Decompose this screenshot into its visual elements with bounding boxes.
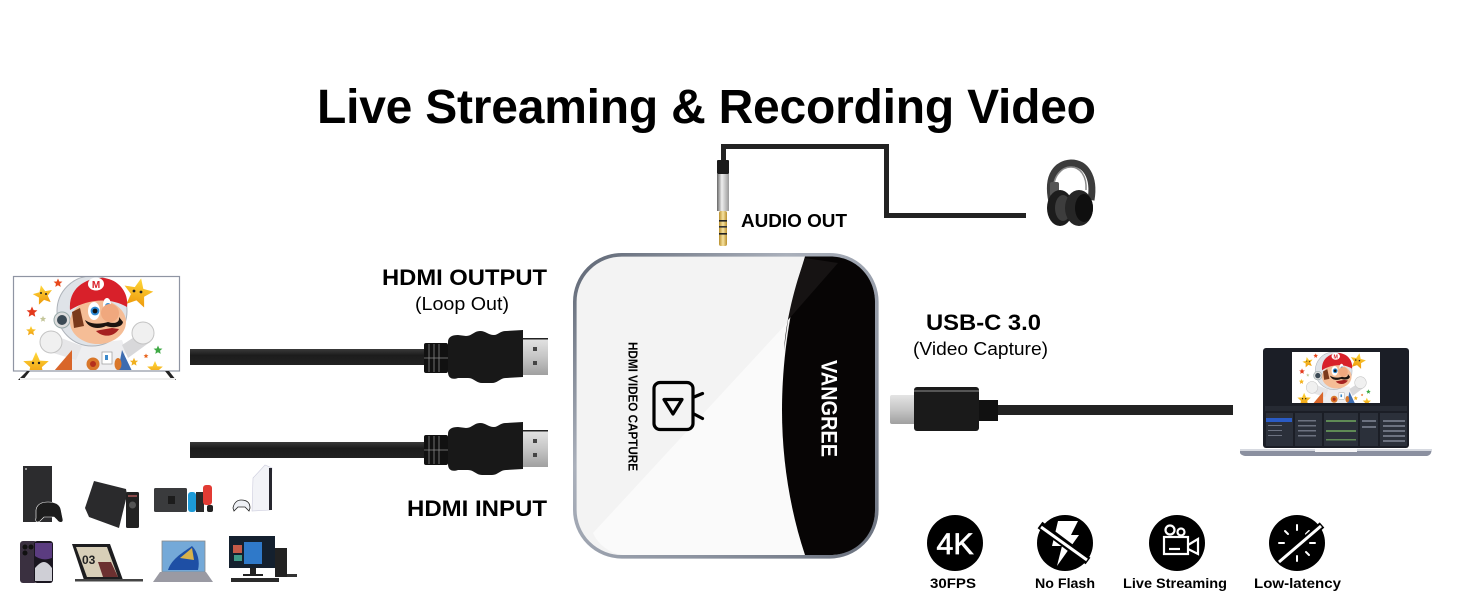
- icon: handheld console: [154, 485, 213, 512]
- feature: live streaming: Live Streaming: [1123, 575, 1227, 591]
- feature: 4K 30FPS: 30FPS: [930, 575, 976, 591]
- icon: white game console: [233, 465, 272, 511]
- label: USB-C: USB-C 3.0: [926, 310, 1041, 335]
- label: HDMI input: HDMI INPUT: [407, 496, 547, 521]
- icon: notebook: [153, 541, 213, 582]
- feature: no flash: No Flash: [1035, 575, 1095, 591]
- label: HDMI output: (Loop Out): [415, 294, 509, 314]
- laptop with streaming software: [1240, 348, 1432, 456]
- device: capture card: [575, 255, 877, 557]
- feature: live streaming: [1123, 515, 1227, 591]
- icon: tablet: [72, 544, 143, 582]
- feature: no flash: [1035, 515, 1095, 591]
- icon: game console tower: [23, 466, 63, 522]
- feature: low latency: [1254, 515, 1341, 591]
- brand: VANGREE: VANGREE: [816, 360, 842, 457]
- feature: 4K 30FPS: [927, 515, 983, 591]
- audio cable: [724, 146, 1026, 216]
- icon: TV play: [654, 382, 702, 430]
- label: USB-C: (Video Capture): [913, 339, 1048, 359]
- label: HDMI output: HDMI OUTPUT: [382, 265, 547, 290]
- icon: headphones: [1047, 163, 1093, 226]
- icon: TV box and remote: [85, 481, 139, 528]
- TV with game picture: [13, 275, 180, 380]
- label: audio out: AUDIO OUT: [741, 210, 848, 231]
- source devices: [20, 465, 297, 583]
- HDMI input cable: [190, 422, 548, 475]
- USB-C cable: [890, 387, 1233, 431]
- label: USB-C: [913, 310, 1048, 359]
- HDMI output cable: [190, 330, 548, 383]
- icon: desktop PC: [229, 536, 297, 582]
- feature: low latency: Low-latency: [1254, 575, 1341, 591]
- title: Live Streaming & Recording Video: [317, 81, 1096, 134]
- product name: HDMI VIDEO CAPTURE: [626, 342, 640, 471]
- icon: audio jack: [717, 160, 729, 246]
- icon: phone: [20, 541, 53, 583]
- feature: 4K 30FPS: 4K: [936, 528, 974, 561]
- icon: tablet: 03: [82, 553, 96, 567]
- label: HDMI output: [382, 265, 547, 314]
